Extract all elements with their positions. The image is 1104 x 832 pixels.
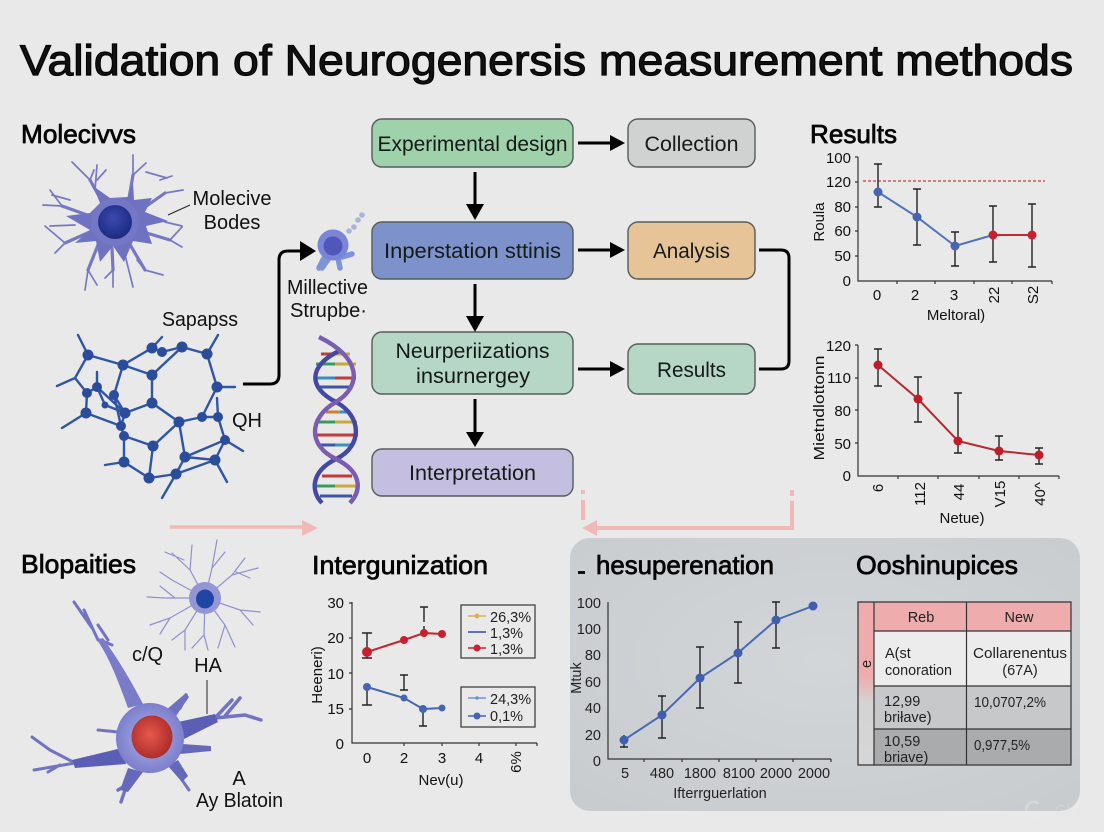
label: HA: [194, 655, 223, 714]
line chart: hesuperenation: 80: [585, 648, 601, 664]
box: collection: Collection: [644, 132, 738, 156]
line chart: results bottom: 40^: [1032, 482, 1049, 506]
line chart: hesuperenation: 8100: [723, 766, 755, 782]
watermark: [1026, 802, 1082, 819]
panel background: [570, 538, 1080, 811]
line chart: hesuperenation: [569, 596, 831, 802]
icon: small neuron: [147, 540, 260, 650]
line chart: results bottom: 44: [951, 484, 968, 500]
table: New: [1004, 610, 1034, 626]
line chart: intergunization: 3: [438, 750, 446, 767]
legend: top: 1,3%: [490, 642, 523, 658]
line chart: results top: 100: [826, 150, 851, 167]
box: interpretation: Interpretation: [409, 461, 536, 485]
arrow: stimuli to neurperizations: [466, 284, 484, 332]
table: (67A): [1002, 663, 1038, 679]
box: analysis: Analysis: [653, 239, 730, 263]
heading: intergunization: Intergunization: [312, 550, 488, 580]
label: molecive bodes: Molecive: [193, 188, 271, 210]
arrow: design to collection: [578, 135, 625, 151]
line chart: results bottom: 120: [826, 338, 851, 355]
heading: hesuperenation: hesuperenation: [596, 550, 774, 580]
table: 10,59: [884, 734, 920, 750]
box: neurperizations insurnergey: [372, 332, 573, 394]
table: 0,977,5%: [974, 738, 1030, 754]
table: 12,99: [884, 694, 920, 710]
heading: ooshinupices: Ooshinupices: [856, 550, 1018, 580]
box: results: [628, 344, 755, 394]
label: A Ay Blatoin: Ay Blatoin: [196, 790, 283, 812]
line chart: results top: 50: [834, 248, 851, 265]
panel: resuperenation and table: [569, 538, 1082, 819]
table: briłave): [884, 710, 932, 726]
line chart: intergunization: 15: [327, 701, 344, 718]
line chart: results top: 2: [911, 287, 919, 304]
label: HA: HA: [194, 655, 223, 677]
heading: molecules: Molecivvs: [21, 119, 136, 149]
legend: top: 26,3%: [490, 610, 531, 626]
label: QH: QH: [232, 410, 262, 432]
arrow: design to stimuli: [466, 172, 484, 220]
box: interpretation stimuli: Inperstation sttinis: [384, 239, 561, 263]
box: experimental design: [372, 119, 573, 167]
legend: bottom: 24,3%: [490, 692, 531, 708]
box: neurperizations insurnergey: insurnergey: [416, 364, 530, 388]
icon: DNA helix: [315, 337, 358, 503]
line chart: hesuperenation: 40: [585, 701, 601, 717]
line chart: results bottom: 80: [834, 403, 851, 420]
line chart: results bottom: 50: [834, 436, 851, 453]
table: e: [859, 660, 875, 668]
arrow: neurperizations to results: [578, 361, 625, 377]
icon: blue neuron: [43, 155, 183, 290]
line chart: results top: [811, 150, 1052, 324]
line chart: results top: 0: [873, 287, 881, 304]
label: molecive bodes: [168, 188, 271, 234]
line chart: hesuperenation: 0: [593, 754, 601, 770]
line chart: hesuperenation: 100: [577, 622, 601, 638]
line chart: intergunization: 6%: [508, 751, 525, 773]
line chart: intergunization: [309, 595, 537, 789]
arrow: analysis to results connector: [759, 250, 789, 369]
line chart: hesuperenation: 2000: [798, 766, 830, 782]
table: 10,0707,2%: [974, 695, 1046, 711]
label: A Ay Blatoin: [196, 768, 283, 812]
label: molecive bodes: Bodes: [204, 212, 260, 234]
legend: top: [461, 605, 535, 658]
line chart: results bottom: 112: [912, 482, 929, 506]
panel: results charts: [810, 119, 1059, 527]
line chart: hesuperenation: 5: [621, 766, 629, 782]
line chart: intergunization: 0: [336, 736, 344, 753]
table: A(st: [885, 646, 911, 662]
arrow: neurperizations to interpretation: [466, 399, 484, 447]
line chart: hesuperenation: 20: [585, 728, 601, 744]
line chart: results bottom: [811, 338, 1059, 527]
line chart: results bottom: 110: [827, 370, 851, 387]
icon: large neuron with red nucleus: [32, 602, 261, 802]
panel: biopaities: [21, 540, 283, 812]
arrow: pink left connector: [170, 520, 318, 536]
line chart: intergunization: 20: [327, 630, 344, 647]
box: interpretation: [372, 449, 573, 496]
line chart: hesuperenation: Mtuk: [569, 662, 585, 694]
label: millective strupbe: [287, 277, 368, 322]
line chart: results top: 120: [826, 174, 851, 191]
panel: flow chart: [372, 119, 789, 496]
label: millective strupbe: Strupbe·: [290, 300, 367, 322]
box: experimental design: Experimental design: [378, 132, 568, 156]
icon: molecular network: [57, 335, 243, 498]
heading: blopaities: Blopaities: [21, 549, 136, 579]
line chart: results top: 60: [834, 223, 851, 240]
line chart: intergunization: 0: [363, 750, 371, 767]
line chart: results bottom: V15: [992, 481, 1009, 507]
panel: molecules: [21, 119, 271, 498]
label: sapapss: Sapapss: [162, 309, 238, 331]
line chart: intergunization: 2: [400, 750, 408, 767]
line chart: results bottom: 6: [870, 484, 887, 492]
table: Collarenentus: [973, 646, 1067, 662]
box: analysis: [628, 222, 755, 279]
line chart: intergunization: 30: [327, 595, 344, 612]
line chart: intergunization: Heeneri): [309, 646, 326, 704]
box: interpretation stimuli: [372, 222, 573, 279]
legend: bottom: [461, 687, 535, 727]
line chart: hesuperenation: 480: [650, 766, 674, 782]
line chart: hesuperenation: Ifterrguerlation: [673, 786, 767, 802]
arrow: pink right connector: [582, 490, 792, 536]
table: briave): [884, 750, 928, 766]
label: A Ay Blatoin: A: [232, 768, 246, 790]
line chart: results top: Roula: [811, 202, 828, 242]
line chart: hesuperenation: 100: [577, 596, 601, 612]
box: neurperizations insurnergey: Neurperiizations: [396, 339, 550, 363]
line chart: results top: Meltoral): [927, 307, 985, 324]
line chart: results top: 80: [834, 199, 851, 216]
line chart: intergunization: 10: [327, 666, 344, 683]
table: conoration: [885, 663, 952, 679]
line chart: hesuperenation: 1800: [684, 766, 716, 782]
line chart: results bottom: Netue): [939, 510, 985, 527]
label: c/Q: c/Q: [132, 644, 163, 666]
line chart: intergunization: Nev(u): [418, 772, 464, 789]
line chart: hesuperenation: 2000: [760, 766, 792, 782]
label: millective strupbe: Millective: [287, 277, 368, 299]
legend: top: 1,3%: [490, 626, 523, 642]
line chart: results bottom: Mietndlottonn: [811, 356, 828, 460]
table: [858, 602, 1071, 766]
arrow: stimuli to analysis: [578, 242, 625, 258]
title: Validation of Neurogenersis measurement methods: [20, 37, 1073, 85]
line chart: intergunization: 4: [475, 750, 483, 767]
line chart: hesuperenation: 60: [585, 675, 601, 691]
watermark: Gkir: [1055, 802, 1082, 819]
line chart: results top: S2: [1025, 286, 1042, 304]
panel: intergunization: [309, 550, 537, 789]
box: results: Results: [657, 358, 726, 382]
box: collection: [628, 119, 755, 167]
line chart: results top: 0: [843, 273, 851, 290]
line chart: results top: 22: [986, 287, 1003, 303]
heading: results: Results: [810, 119, 897, 149]
line chart: results top: 3: [950, 287, 958, 304]
arrow: molecule to structure: [243, 241, 316, 384]
icon: molecular cell: [318, 212, 365, 268]
legend: bottom: 0,1%: [490, 709, 523, 725]
line chart: results bottom: 0: [843, 468, 851, 485]
table: Reb: [908, 610, 934, 626]
